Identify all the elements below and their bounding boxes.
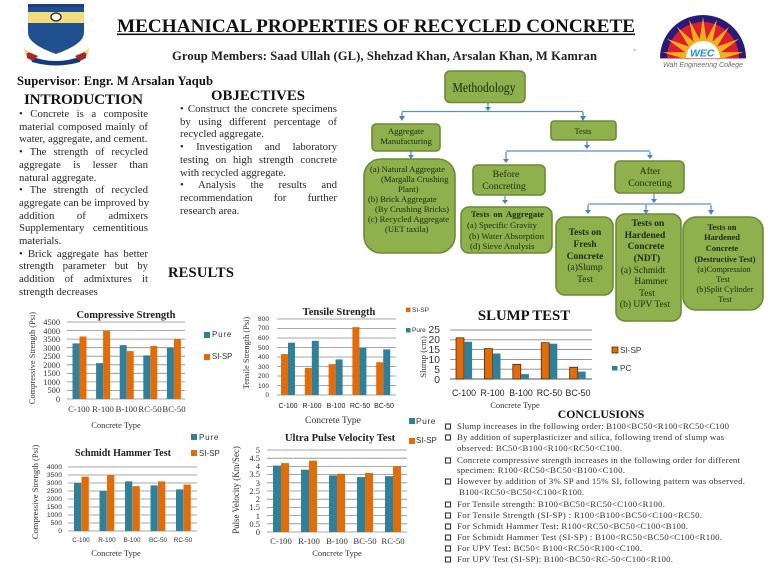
chart: tensile strength: C-100 xyxy=(278,403,298,410)
chart: slump test: 15 xyxy=(429,345,440,356)
chart: tensile strength: 300 xyxy=(258,364,269,371)
text block: introduction: addition of admixers xyxy=(19,210,148,222)
text block: introduction: materials. xyxy=(19,235,61,247)
flowchart: methodology: Tests on Aggregate xyxy=(471,209,544,219)
text block: introduction: • Concrete is a composite xyxy=(19,108,148,120)
chart: tensile strength: 100 xyxy=(258,383,269,390)
box: After Concreting xyxy=(615,161,684,193)
flowchart labels: Test xyxy=(718,295,733,304)
text block: objectives: by using different percentage of xyxy=(180,116,337,128)
chart: slump test: C-100 xyxy=(452,388,476,398)
chart: compressive strength: 0 xyxy=(56,395,60,404)
chart: tensile strength: Tensile Strength (Psi) xyxy=(242,317,251,389)
title: MECHANICAL PROPERTIES OF RECYCLED CONCRETE xyxy=(117,16,635,37)
icon: WEC logo xyxy=(660,15,746,69)
flowchart: methodology: (By Crushing Bricks) xyxy=(375,204,449,214)
chart: ultra pulse velocity test: 2.5 xyxy=(249,486,260,496)
chart: ultra pulse velocity test: Pure xyxy=(416,416,436,426)
text block: objectives: • Construct the concrete specimens xyxy=(180,103,337,115)
chart: ultra pulse velocity test: B-100 xyxy=(326,536,349,546)
chart: ultra pulse velocity test: Ultra Pulse Velocity Test xyxy=(285,433,396,444)
heading: introduction: INTRODUCTION xyxy=(24,91,143,108)
flowchart: methodology: (b) Brick Aggregate xyxy=(368,194,437,204)
flowchart labels: Methodology xyxy=(452,81,516,96)
chart: schmidt hammer test xyxy=(30,433,220,558)
flowchart labels: Aggregate xyxy=(388,126,424,136)
box: Methodology xyxy=(445,71,525,102)
chart: slump test: B-100 xyxy=(509,388,533,398)
chart: compressive strength: C-100 xyxy=(68,404,91,414)
box: Tests xyxy=(551,121,616,140)
flowchart labels: Manufacturing xyxy=(380,136,432,146)
chart: tensile strength: Pure xyxy=(412,327,426,334)
chart: compressive strength: Pure xyxy=(212,330,232,339)
flowchart labels: Tests on xyxy=(569,228,602,238)
flowchart: methodology: (UET taxila) xyxy=(385,224,429,234)
chart: ultra pulse velocity test: 3.5 xyxy=(249,469,260,479)
text block: introduction xyxy=(19,108,150,298)
chart: slump test: 5 xyxy=(434,365,440,376)
chart: ultra pulse velocity test: C-100 xyxy=(270,536,293,546)
flowchart labels: Concrete xyxy=(567,252,603,262)
flowchart labels: (a)Compression xyxy=(697,265,752,274)
flowchart: methodology: (b) Water Absorption xyxy=(469,231,545,241)
conclusions: For Tensile strength: B100<BC50<RC50<C100<R100. xyxy=(457,499,665,509)
flowchart labels: Tests on xyxy=(708,223,737,232)
chart: compressive strength: 2500 xyxy=(43,352,60,361)
text block: introduction: strength decreases xyxy=(19,286,98,298)
chart: tensile strength: Tensile Strength xyxy=(303,307,375,318)
chart: ultra pulse velocity test: Concrete Type xyxy=(312,548,362,558)
chart: compressive strength: 2000 xyxy=(43,361,60,370)
chart: compressive strength: 1500 xyxy=(43,369,60,378)
chart: compressive strength: 4500 xyxy=(43,318,60,327)
flowchart labels: Concrete xyxy=(628,242,664,252)
text block: objectives: testing on high strength concrete xyxy=(180,154,337,166)
flowchart: methodology: (a) Specific Gravity xyxy=(467,220,537,230)
chart: compressive strength: R-100 xyxy=(92,404,115,414)
chart: ultra pulse velocity test xyxy=(231,416,437,558)
text block: objectives: • Investigation and laboratory xyxy=(180,141,337,153)
box: aggregate types xyxy=(364,159,455,253)
flowchart labels: Fresh xyxy=(573,240,597,250)
text block: objectives: • Analysis the results and xyxy=(180,179,337,191)
box: Hardened Concrete Destructive xyxy=(683,217,763,310)
chart: tensile strength: 500 xyxy=(258,345,269,352)
chart: compressive strength: 4000 xyxy=(43,327,60,336)
chart: schmidt hammer test: 2000 xyxy=(47,496,62,503)
chart: schmidt hammer test: 0 xyxy=(58,528,62,535)
chart: slump test xyxy=(418,308,642,410)
chart: slump test: Concrete Type xyxy=(490,400,540,410)
chart: ultra pulse velocity test: 0 xyxy=(256,527,260,537)
flowchart: methodology: (c) Recycled Aggregate xyxy=(368,214,449,224)
chart: compressive strength: 1000 xyxy=(43,378,60,387)
chart: ultra pulse velocity test: RC-50 xyxy=(381,536,405,546)
chart: tensile strength: BC-50 xyxy=(374,403,394,410)
chart: tensile strength: SI-SP xyxy=(412,307,429,314)
chart: schmidt hammer test: 1000 xyxy=(47,512,62,519)
chart: tensile strength: R-100 xyxy=(302,403,322,410)
heading: objectives: OBJECTIVES xyxy=(211,88,305,104)
chart: ultra pulse velocity test: 2 xyxy=(256,494,260,504)
chart: schmidt hammer test: 4000 xyxy=(47,464,62,471)
chart: schmidt hammer test: R-100 xyxy=(98,537,116,544)
chart: slump test: 10 xyxy=(429,355,440,366)
chart: ultra pulse velocity test: Pulse Velocity (Km/Sec) xyxy=(231,446,241,534)
conclusions: However by addition of 3% SP and 15% SI, following pattern was observed. xyxy=(457,476,745,486)
conclusions: For UPV Test (SI-SP): B100<BC50<RC-50<C100<R100. xyxy=(457,554,673,564)
flowchart labels: Before xyxy=(493,169,520,180)
conclusions: For Schmidt Hammer Test (SI-SP) : B100<RC50<BC50<C100<R100. xyxy=(457,532,722,542)
chart: slump test: 0 xyxy=(434,375,440,386)
chart: schmidt hammer test: 3000 xyxy=(47,480,62,487)
chart: compressive strength: Compressive Strength (Psi) xyxy=(28,312,37,404)
flowchart labels: (b)Split Cylinder xyxy=(696,285,754,294)
chart: slump test: 20 xyxy=(429,335,440,346)
chart: ultra pulse velocity test: 4 xyxy=(256,461,261,471)
conclusions: observed: BC50<B100<R100<RC50<C100. xyxy=(457,443,622,453)
chart: tensile strength: 0 xyxy=(265,392,269,399)
flowchart labels: (NDT) xyxy=(634,253,660,264)
box: Before Concreting xyxy=(473,165,545,195)
text block: objectives: recommendation for further xyxy=(180,192,337,204)
chart: schmidt hammer test: Compressive Strength (Psi) xyxy=(30,445,40,539)
text block: introduction: • Brick aggregate has better xyxy=(19,248,148,260)
text block: introduction: • The strength of recycled xyxy=(19,146,148,158)
chart: slump test: SI-SP xyxy=(620,346,642,355)
flowchart labels: (a) Schmidt xyxy=(621,265,666,276)
chart: compressive strength: BC-50 xyxy=(162,404,186,414)
chart: ultra pulse velocity test: BC-50 xyxy=(353,536,377,546)
chart: compressive strength: Concrete Type xyxy=(91,420,141,430)
text block: introduction: strength parameter but by xyxy=(19,260,148,272)
chart: tensile strength: 400 xyxy=(258,354,269,361)
flowchart: methodology: Plant) xyxy=(398,184,419,194)
flowchart labels: (a)Slump xyxy=(567,262,603,273)
chart: ultra pulse velocity test: SI-SP xyxy=(416,436,437,445)
flowchart: methodology: (a) Natural Aggregate xyxy=(370,164,445,174)
chart: ultra pulse velocity test: 0.5 xyxy=(249,519,260,529)
conclusions: Slump increases in the following order: B100<BC50<R100<RC50<C100 xyxy=(457,421,730,431)
chart: compressive strength: 500 xyxy=(47,386,60,395)
chart: schmidt hammer test: RC-50 xyxy=(174,537,193,544)
flowchart: methodology xyxy=(364,71,763,321)
conclusions: specimen: R100<RC50<BC50<B100<C100. xyxy=(457,465,625,475)
chart: schmidt hammer test: 2500 xyxy=(47,488,62,495)
chart: ultra pulse velocity test: 1.5 xyxy=(249,502,260,512)
stray tick mark: ` xyxy=(633,49,636,60)
text block: introduction: material composed mainly of xyxy=(19,121,148,133)
chart: ultra pulse velocity test: 3 xyxy=(256,478,260,488)
conclusions: For Schmidt Hammer Test: R100<RC50<BC50<C100<B100. xyxy=(457,521,688,531)
icon: WEC logo: Wah Engineering College xyxy=(663,62,743,69)
conclusions: B100<RC50<BC50<C100<R100. xyxy=(459,487,584,497)
flowchart labels: Hardened xyxy=(704,233,740,242)
chart: compressive strength: RC-50 xyxy=(138,404,162,414)
box: Tests on Fresh Concrete xyxy=(556,217,613,295)
chart: slump test: 25 xyxy=(429,325,440,336)
chart: tensile strength: 600 xyxy=(258,335,269,342)
flowchart: methodology: (d) Sieve Analysis xyxy=(470,241,535,251)
text block: introduction: natural aggregate. xyxy=(19,172,96,184)
chart: compressive strength: SI-SP xyxy=(212,352,232,361)
chart: schmidt hammer test: 3500 xyxy=(47,472,62,479)
flowchart: methodology: (Margalla Crushing xyxy=(381,174,449,184)
conclusions: By addition of superplasticizer and silica, following trend of slump was xyxy=(457,432,725,442)
chart: tensile strength: 700 xyxy=(258,325,269,332)
icon: WEC logo: WEC xyxy=(690,48,715,60)
text block: introduction: addition of admixtures it xyxy=(19,273,148,285)
chart: slump test: BC-50 xyxy=(566,388,591,398)
connector arrows xyxy=(399,103,714,215)
text block: introduction: aggregate can be improved by xyxy=(19,197,149,209)
flowchart labels: Test xyxy=(639,289,655,299)
flowchart labels: Test xyxy=(577,275,593,285)
flowchart labels: (b) UPV Test xyxy=(620,299,670,310)
chart: compressive strength: 3500 xyxy=(43,335,60,344)
group members: Group Members: Saad Ullah (GL), Shehzad Khan, Arsalan Khan, M Kamran xyxy=(172,49,597,63)
flowchart labels: Tests on xyxy=(632,219,665,229)
chart: compressive strength: 3000 xyxy=(43,344,60,353)
text block: introduction: Supplementary cementitious xyxy=(19,222,148,234)
flowchart labels: Concreting xyxy=(628,178,672,189)
chart: schmidt hammer test: B-100 xyxy=(123,537,141,544)
heading: results: RESULTS xyxy=(168,265,234,281)
conclusions: For UPV Test: BC50< B100<RC50<R100<C100. xyxy=(457,543,642,553)
flowchart labels: After xyxy=(640,166,661,177)
text block: objectives: with recycled aggregate. xyxy=(180,167,286,179)
supervisor: Supervisor: Engr. M Arsalan Yaqub xyxy=(17,74,213,88)
box: Tests on Aggregate xyxy=(461,207,552,253)
chart: slump test: Slump (cm) xyxy=(418,336,428,378)
box: Aggregate Manufacturing xyxy=(372,124,440,151)
chart: ultra pulse velocity test: 1 xyxy=(256,511,260,521)
chart: tensile strength xyxy=(242,307,429,426)
chart: slump test: R-100 xyxy=(481,388,505,398)
flowchart labels xyxy=(380,81,756,310)
flowchart labels: Hammer xyxy=(634,277,668,287)
chart: schmidt hammer test: 1500 xyxy=(47,504,62,511)
chart: schmidt hammer test: SI-SP xyxy=(199,449,220,458)
conclusions: CONCLUSIONS xyxy=(558,407,645,421)
text block: objectives: research area. xyxy=(180,205,239,217)
chart: compressive strength xyxy=(28,310,232,430)
chart: schmidt hammer test: BC-50 xyxy=(149,537,167,544)
chart: ultra pulse velocity test: 5 xyxy=(256,445,260,455)
text block: introduction: • The strength of recycled xyxy=(19,184,148,196)
chart: schmidt hammer test: Concrete Type xyxy=(91,548,141,558)
chart: ultra pulse velocity test: R-100 xyxy=(298,536,321,546)
chart: compressive strength: B-100 xyxy=(116,404,138,414)
chart: slump test: SLUMP TEST xyxy=(478,308,570,324)
chart: tensile strength: 200 xyxy=(258,373,269,380)
conclusions: For Tensile Strength (SI-SP) : R100<B100<BC50<C100<RC50. xyxy=(457,510,702,520)
conclusions: Concrete compressive strength increases in the following order for different xyxy=(457,455,741,465)
text block: objectives: recycled aggregate. xyxy=(180,128,264,140)
box: Hardened Concrete NDT xyxy=(616,214,681,321)
chart: schmidt hammer test: Pure xyxy=(199,433,219,442)
chart: tensile strength: Concrete Type xyxy=(305,415,361,426)
chart: ultra pulse velocity test: 4.5 xyxy=(249,453,260,463)
flowchart labels: Tests xyxy=(574,127,592,136)
text block: objectives xyxy=(180,103,337,217)
chart: schmidt hammer test: Schmidt Hammer Test xyxy=(75,448,172,459)
chart: tensile strength: B-100 xyxy=(327,403,345,410)
chart: schmidt hammer test: 500 xyxy=(51,520,62,527)
flowchart labels: Concrete xyxy=(706,244,738,253)
chart: slump test: RC-50 xyxy=(537,388,562,398)
flowchart labels: Test xyxy=(716,275,731,284)
chart: schmidt hammer test: C-100 xyxy=(72,537,90,544)
icon: university shield logo xyxy=(24,4,89,66)
text block: introduction: aggregate is lesser than xyxy=(19,159,148,171)
text block: introduction: water, aggregate, and cement. xyxy=(19,133,147,145)
chart: tensile strength: 800 xyxy=(258,316,269,323)
flowchart labels: (Destructive Test) xyxy=(695,255,756,264)
conclusions xyxy=(446,407,745,564)
flowchart labels: Concreting xyxy=(482,181,526,192)
chart: tensile strength: RC-50 xyxy=(350,403,370,410)
chart: compressive strength: Compressive Strength xyxy=(76,310,176,321)
flowchart labels: Hardened xyxy=(625,231,666,241)
chart: slump test: PC xyxy=(620,364,631,373)
